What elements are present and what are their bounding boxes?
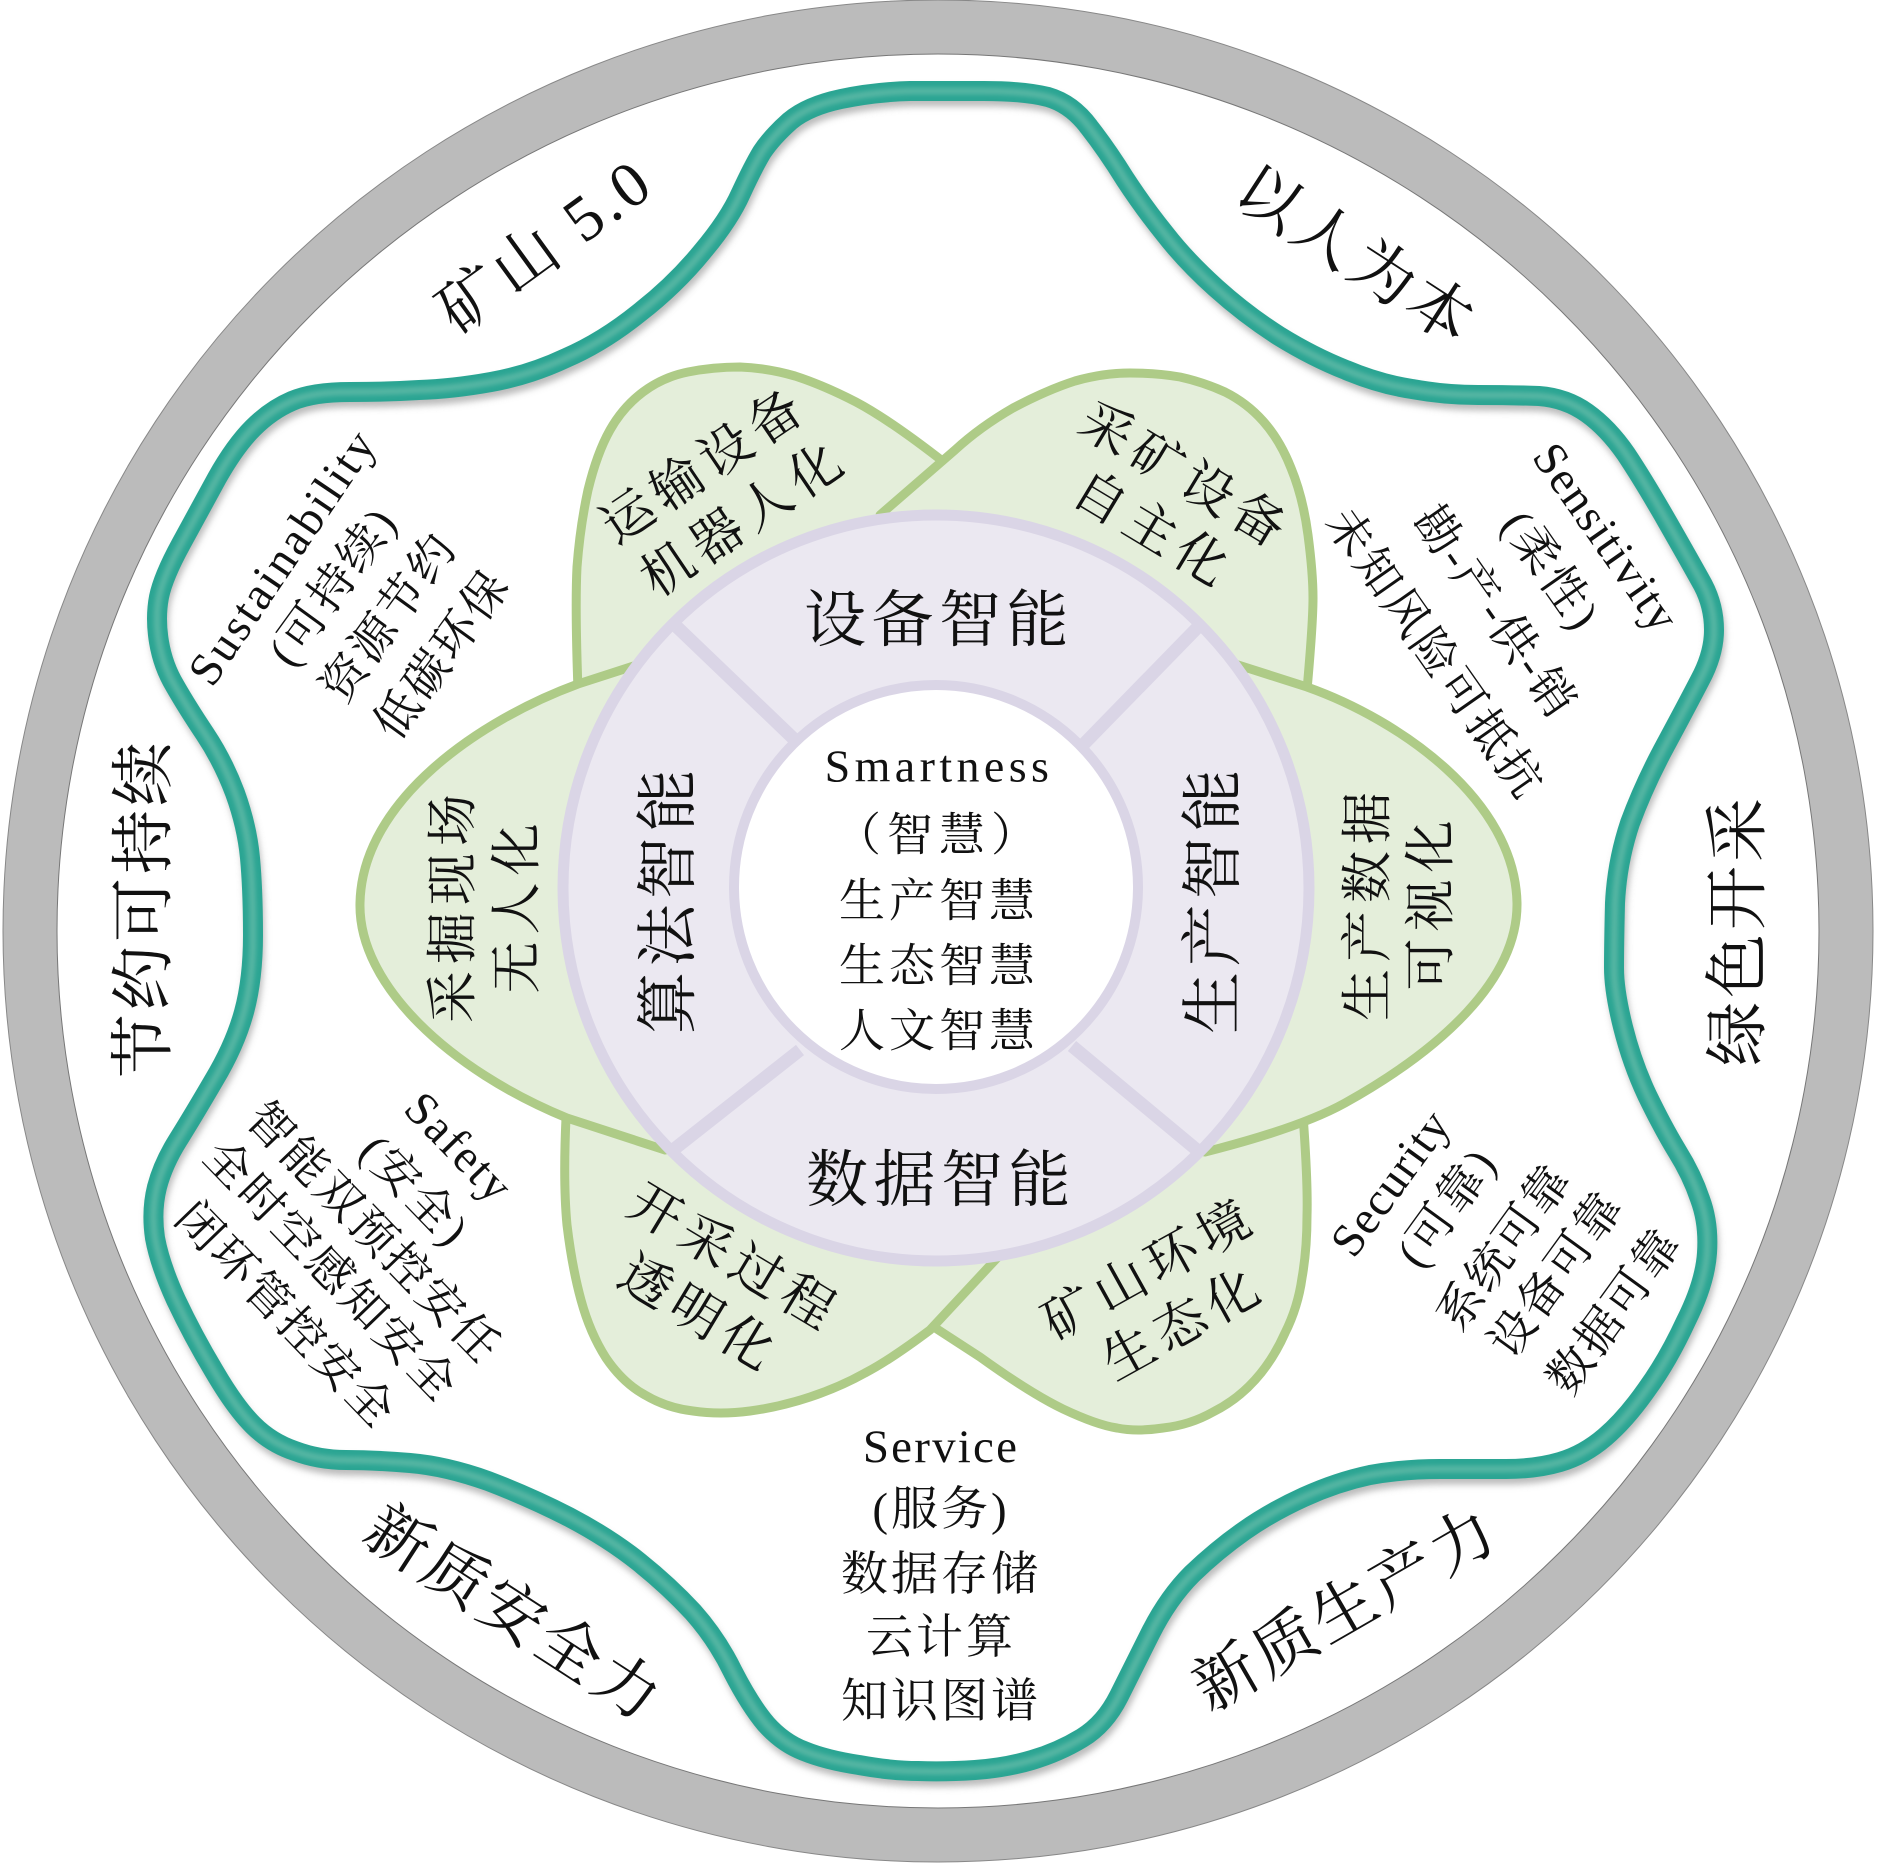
text block: Service: 云计算 <box>866 1612 1016 1664</box>
label: 绿色开采: 绿色开采 <box>1702 794 1774 1066</box>
petal text: 生产数据可视化 <box>1340 785 1460 1021</box>
text block: Sensitivity <box>1316 434 1690 809</box>
text block: Service: 知识图谱 <box>841 1676 1041 1728</box>
center text: Smartness: 生产智慧 <box>839 876 1039 926</box>
text block: Safety: (安全) <box>350 1125 480 1257</box>
text block: Sustainability: Sustainability <box>178 419 388 695</box>
petal text: 采矿设备自主化: 采矿设备 <box>1069 392 1301 562</box>
label: 新质安全力: 新质安全力 <box>352 1492 676 1736</box>
label: 新质生产力: 新质生产力 <box>1181 1493 1511 1725</box>
center text: Smartness <box>825 740 1053 1056</box>
text block: Security <box>1321 1100 1691 1404</box>
text block: Safety: Safety <box>394 1082 524 1214</box>
text block: Safety: 闭环管控安全 <box>166 1192 406 1438</box>
petal text: 开采过程透明化: 开采过程 <box>618 1174 850 1344</box>
text block: Service <box>841 1421 1041 1728</box>
text block: Security: 数据可靠 <box>1537 1218 1691 1404</box>
petal text: 矿山环境生态化: 矿山环境 <box>1033 1188 1267 1352</box>
text block: Safety: 智能双预控安任 <box>237 1092 511 1374</box>
petal text: 运输设备机器人化: 机器人化 <box>631 429 859 609</box>
petal text: 运输设备机器人化 <box>591 376 859 609</box>
text block: Sensitivity: 未知风险可抵抗 <box>1316 499 1554 809</box>
center text: Smartness: Smartness <box>825 740 1053 792</box>
ring label: 算法智能: 算法智能 <box>635 764 703 1034</box>
petal text: 采矿设备自主化: 自主化 <box>1062 461 1244 601</box>
text block: Sustainability <box>178 419 520 748</box>
label: 矿山 5.0: 矿山 5.0 <box>424 144 666 348</box>
ring label: 设备智能: 设备智能 <box>804 587 1074 655</box>
text block: Service: 数据存储 <box>841 1549 1041 1601</box>
text block: Sustainability: 资源节约 <box>311 523 467 711</box>
teal wavy boundary <box>153 91 1716 1777</box>
petal text: 生产数据可视化: 生产数据 <box>1340 785 1398 1021</box>
ring label: 生产智能: 生产智能 <box>1180 764 1248 1034</box>
text block: Sensitivity: 勘-产-供-销 <box>1403 496 1587 728</box>
text block: Safety: 全时空感知安全 <box>194 1130 468 1412</box>
text block: Security: (可靠) <box>1387 1138 1507 1276</box>
center text: Smartness: （智慧） <box>835 810 1043 860</box>
label: 节约可持续: 节约可持续 <box>108 738 180 1078</box>
petal text: 开采过程透明化: 透明化 <box>608 1245 790 1385</box>
text block: Service: Service <box>863 1421 1019 1473</box>
text block: Sustainability: 低碳环保 <box>364 560 520 748</box>
text block: Service: (服务) <box>872 1484 1010 1536</box>
text block: Security: 系统可靠 <box>1427 1154 1581 1340</box>
petal text: 采掘现场无人化 <box>426 787 546 1023</box>
label: 以人为本: 以人为本 <box>1223 152 1489 360</box>
text block: Security: Security <box>1321 1100 1461 1266</box>
petal text: 生产数据可视化: 可视化 <box>1404 813 1460 991</box>
text block: Sensitivity: Sensitivity <box>1522 434 1690 642</box>
purple ring with dividers <box>563 515 1309 1261</box>
center text: Smartness: 生态智慧 <box>839 940 1039 992</box>
center text: Smartness: 人文智慧 <box>839 1006 1039 1056</box>
petal text: 采掘现场无人化: 无人化 <box>490 816 546 994</box>
petal text: 采掘现场无人化: 采掘现场 <box>426 787 482 1023</box>
text block: Sustainability: (可持续) <box>258 497 408 675</box>
text block: Security: 设备可靠 <box>1479 1181 1633 1367</box>
green flower petals <box>360 367 1517 1430</box>
ring label: 数据智能: 数据智能 <box>806 1147 1076 1215</box>
text block: Safety <box>166 1082 524 1438</box>
text block: Sensitivity: (柔性) <box>1491 501 1611 641</box>
petal text: 运输设备机器人化: 运输设备 <box>591 376 819 556</box>
petal text: 矿山环境生态化: 生态化 <box>1093 1256 1275 1392</box>
